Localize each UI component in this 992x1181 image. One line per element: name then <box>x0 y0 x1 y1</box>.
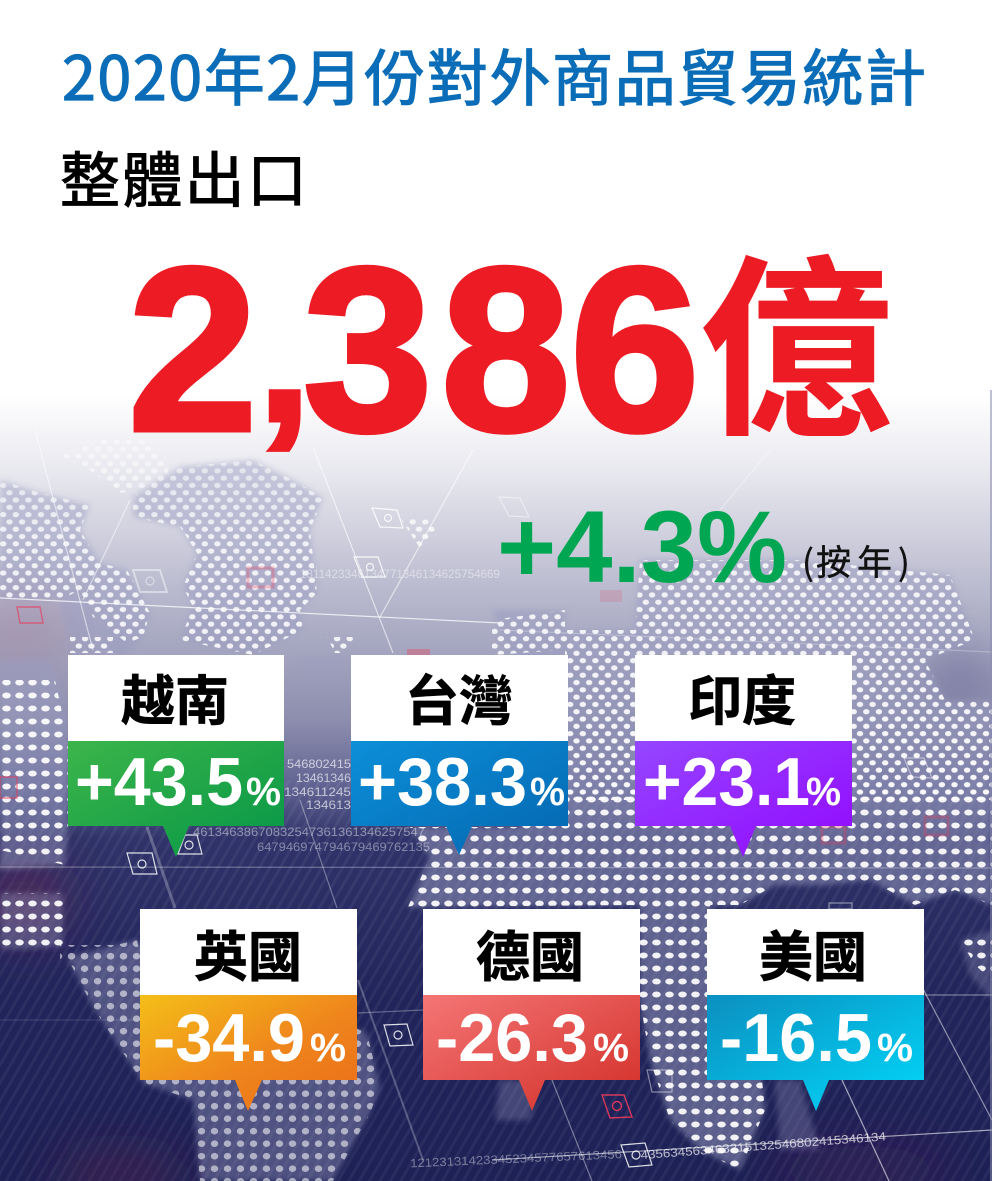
card: India: 印度 <box>688 657 796 736</box>
card: India: +23.1 <box>643 744 810 820</box>
card: Germany <box>423 909 640 1111</box>
card: Germany: -26.3 <box>436 1000 588 1076</box>
grid lines <box>0 430 992 1181</box>
card: USA <box>707 909 924 1111</box>
headline figure: 億 <box>699 194 893 475</box>
card: Taiwan: +38.3 <box>358 744 527 820</box>
right edge <box>990 390 992 1181</box>
reticles <box>127 497 932 1167</box>
card: Vietnam: 越南 <box>121 657 229 736</box>
card: UK <box>140 909 357 1111</box>
number strings: 134613 <box>306 798 351 812</box>
number strings: 12123131423345234577657613456 <box>410 1147 623 1170</box>
number strings: 134611245 <box>284 785 351 799</box>
card: UK: % <box>310 1026 346 1070</box>
card: USA: 美國 <box>759 913 867 992</box>
number strings: 1311423346134771346134625754669 <box>300 567 500 581</box>
reddish haze <box>0 590 992 1181</box>
headline figure <box>128 194 893 480</box>
card: USA: % <box>877 1026 913 1070</box>
card: Vietnam: % <box>246 770 281 814</box>
number strings: 13461346 <box>296 771 351 785</box>
card: India: % <box>806 770 841 814</box>
card: Germany: % <box>593 1026 629 1070</box>
subtitle: overall exports: 整體出口 <box>60 133 307 220</box>
card: Vietnam: +43.5 <box>75 744 243 820</box>
card: UK: 英國 <box>194 913 302 992</box>
number strings <box>193 567 887 1170</box>
year on year change: (按年) <box>802 535 910 586</box>
card: USA: -16.5 <box>720 1000 872 1076</box>
card: Vietnam <box>68 655 284 857</box>
headline figure: 2 <box>128 220 258 480</box>
card: Germany: 德國 <box>476 913 584 992</box>
background: world map with dots <box>0 254 992 1181</box>
year on year change: +4.3% <box>497 490 787 604</box>
card: Taiwan: 台灣 <box>405 657 513 736</box>
number strings: 647946974794679469762135 <box>257 840 430 854</box>
dots <box>0 440 992 800</box>
headline figure: 8 <box>441 220 571 480</box>
card: Taiwan <box>351 655 568 855</box>
card: India <box>635 655 852 857</box>
headline figure: 3 <box>303 220 433 480</box>
title: 2020年2月份對外商品貿易統計 <box>62 29 926 118</box>
number strings: 546802415 <box>287 757 351 771</box>
headline figure: , <box>258 249 311 461</box>
number strings: 435634563463215132546802415346134 <box>640 1129 887 1162</box>
number strings: 46134638670832547361361346257547 <box>193 825 425 839</box>
land tint <box>0 460 992 1181</box>
card: UK: -34.9 <box>153 1000 305 1076</box>
headline figure: 6 <box>570 220 700 480</box>
card: Taiwan: % <box>530 770 565 814</box>
